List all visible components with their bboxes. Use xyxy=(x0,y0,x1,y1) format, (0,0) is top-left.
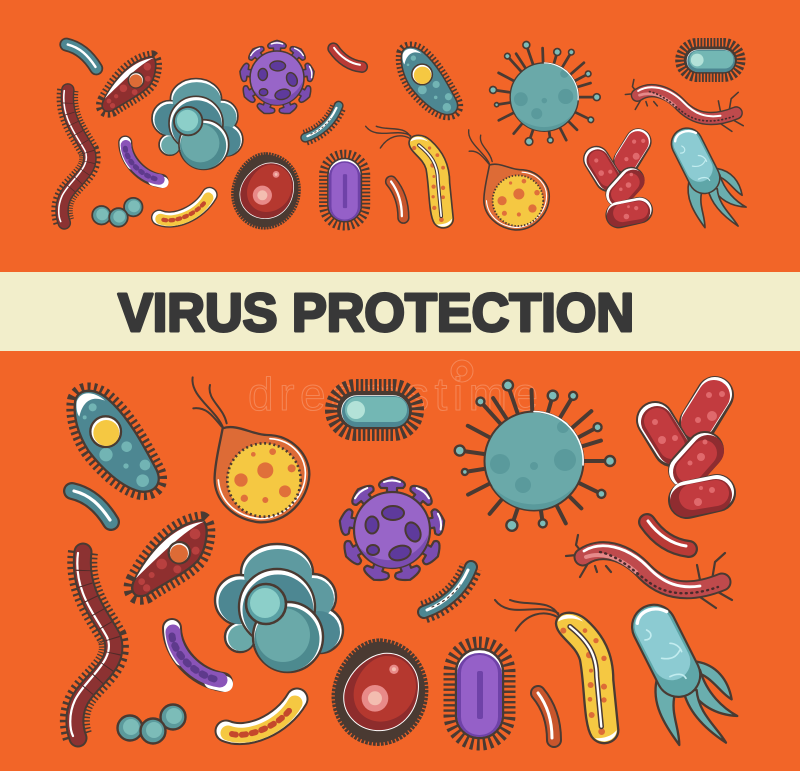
microbe: three teal cocci xyxy=(118,704,186,744)
microbe copy: red paramecium xyxy=(102,57,156,111)
microbe: ciliated small rod xyxy=(424,567,471,612)
microbe copy: teal paramecium xyxy=(401,47,458,115)
microbe copy: fringed teal capsule xyxy=(684,47,737,73)
microbe: small brown rod xyxy=(538,693,554,740)
microbe: blue tentacled bacillus xyxy=(637,609,737,745)
microbe: teal paramecium xyxy=(75,391,159,492)
microbe: yellow flagellated rod xyxy=(495,600,618,743)
microbe: small teal rod xyxy=(72,491,111,522)
microbe copy: yellow flagellated rod xyxy=(366,126,453,228)
microbe: long dark red worm xyxy=(70,552,114,738)
panel: upper microbes xyxy=(59,40,746,230)
title text: VIRUS PROTECTION xyxy=(118,283,634,343)
microbe copy: purple coronavirus xyxy=(238,40,316,117)
watermark: dreamstime xyxy=(248,368,538,420)
microbe: purple curved rod xyxy=(172,628,225,684)
microbe copy: red capsule group xyxy=(594,139,645,219)
microbe: fringed teal capsule xyxy=(337,391,412,429)
microbe copy: teal cell cluster xyxy=(152,79,243,169)
microbe copy: pink segmented worm xyxy=(625,80,743,131)
microbe: teal cell cluster xyxy=(215,544,343,672)
microbe: purple fringed capsule xyxy=(455,648,504,739)
microbe: flagellate with yellow nucleus xyxy=(192,377,309,522)
microbe copy: yellow curved bacillus xyxy=(159,195,210,221)
microbe: pink segmented worm xyxy=(566,535,732,608)
microbe: purple coronavirus xyxy=(338,477,446,584)
microbe copy: flagellate with yellow nucleus xyxy=(469,130,549,230)
microbe copy: small teal rod xyxy=(66,45,96,68)
microbe copy: purple curved rod xyxy=(125,143,163,182)
microbe copy: purple fringed capsule xyxy=(327,158,362,222)
microbe copy: small brown rod xyxy=(391,182,403,218)
microbe copy: three teal cocci xyxy=(92,198,143,227)
microbe: spiky teal virus xyxy=(454,379,615,532)
microbe copy: red egg cell xyxy=(233,154,298,227)
microbe copy: ciliated small rod xyxy=(305,106,339,138)
microbe: red paramecium xyxy=(132,520,207,596)
microbe copy: blue tentacled bacillus xyxy=(675,131,746,228)
microbe copy: small red rod xyxy=(333,48,362,67)
microbe: red capsule group xyxy=(652,391,725,506)
microbe: small red rod xyxy=(647,521,689,549)
panel: lower microbes xyxy=(70,360,737,745)
microbe: red egg cell xyxy=(335,642,425,743)
microbe: yellow curved bacillus xyxy=(226,699,297,735)
microbe copy: long dark red worm xyxy=(59,90,90,223)
title banner xyxy=(0,272,800,351)
microbe copy: spiky teal virus xyxy=(489,41,600,146)
